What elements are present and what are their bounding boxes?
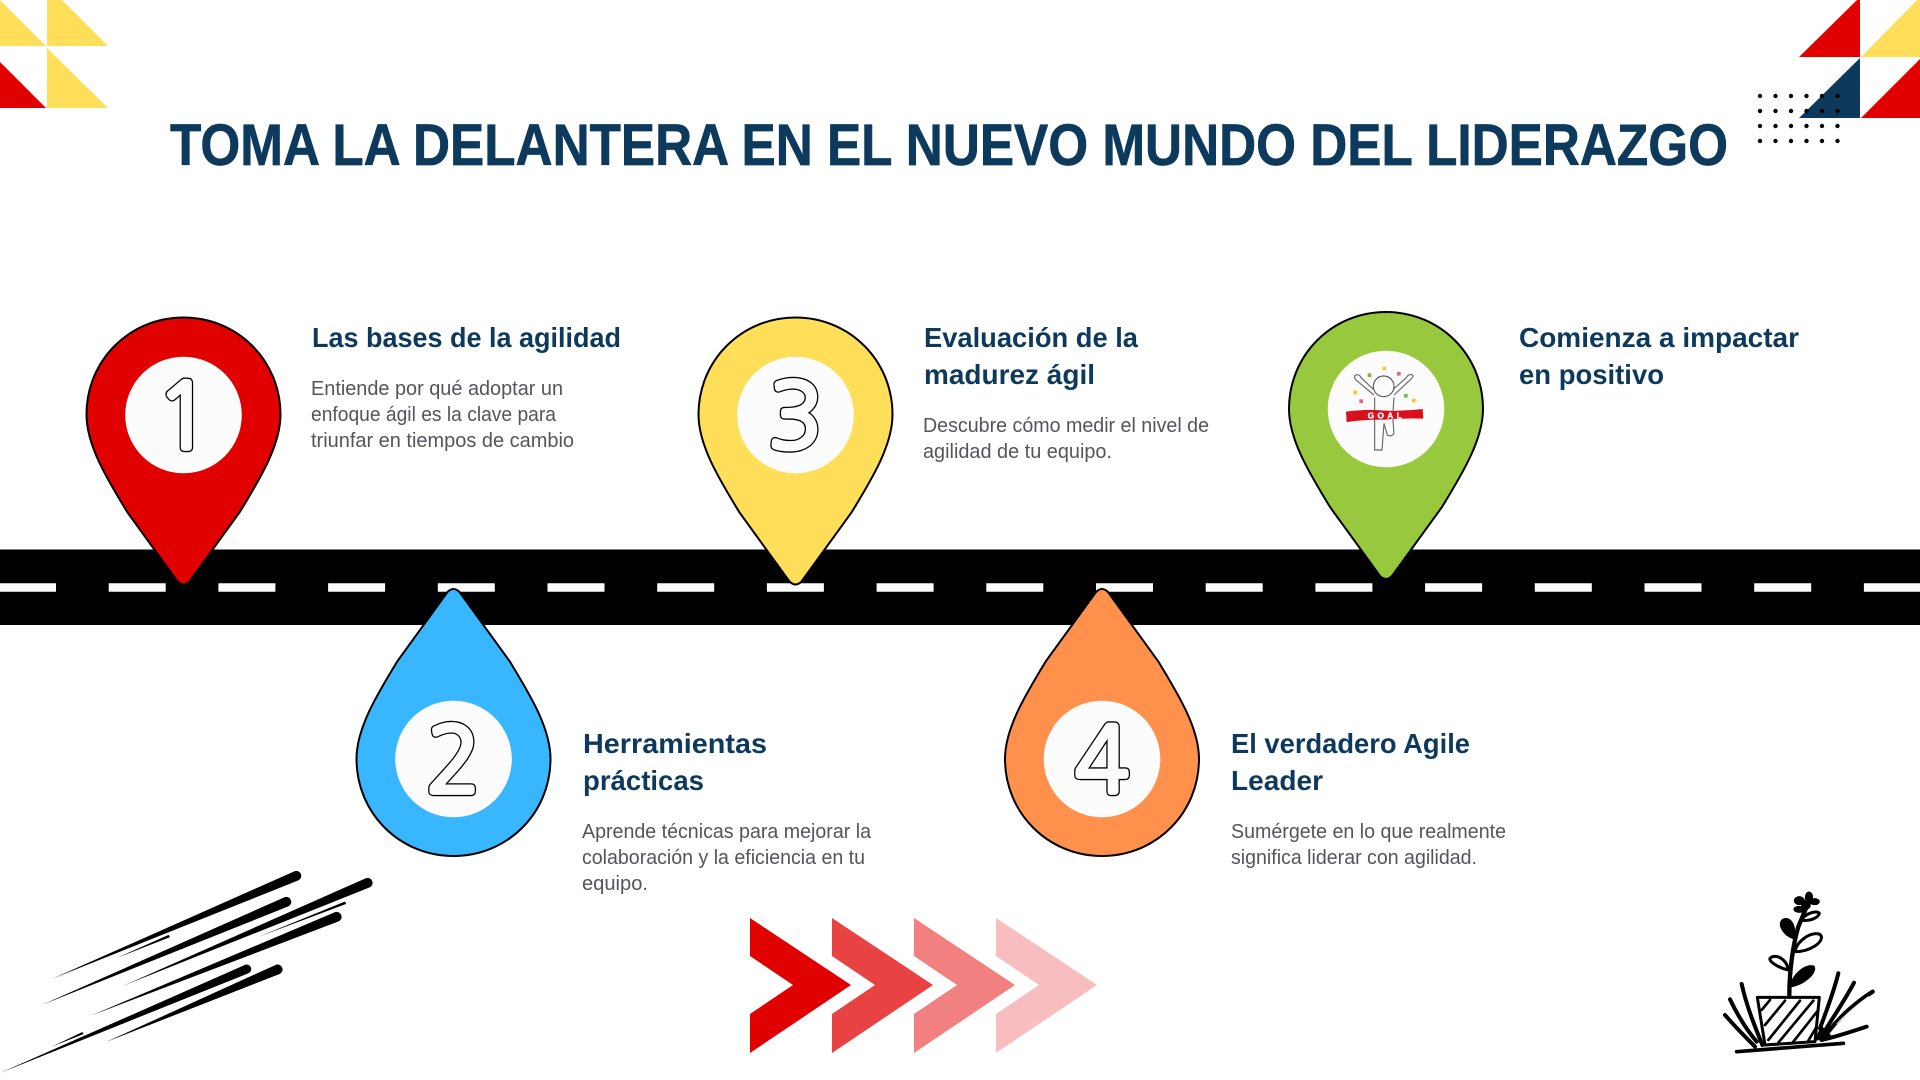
arrows: chevrons: [750, 918, 1097, 1053]
step 1 text: Las bases de la agilidad: [312, 322, 621, 353]
title: TOMA LA DELANTERA EN EL NUEVO MUNDO DEL LIDERAZGO: [170, 113, 1728, 178]
icon: potted plant: [1725, 892, 1873, 1052]
step 1 text: enfoque ágil es la clave para: [311, 403, 557, 426]
step 4 drop: 4: [1075, 715, 1129, 805]
step 4 text: Sumérgete en lo que realmente: [1231, 820, 1506, 843]
step 2 text: equipo.: [582, 872, 648, 895]
step 1 pin: 1: [156, 371, 211, 461]
step 3 pin: 3: [768, 371, 823, 461]
decoration: top-right triangles and dots: [1758, 0, 1920, 143]
icon: goal runner: [1346, 367, 1423, 450]
road: [0, 550, 1920, 625]
step 2 text: colaboración y la eficiencia en tu: [582, 846, 865, 869]
step 5 text: [1519, 322, 1799, 390]
step 2 drop: 2: [426, 715, 481, 805]
step 3 text: [923, 322, 1209, 463]
step 3 pin: 3: [768, 371, 823, 461]
step 3 text: agilidad de tu equipo.: [923, 440, 1112, 463]
step 5 text: Comienza a impactar: [1519, 322, 1799, 353]
step 3 text: madurez ágil: [924, 359, 1095, 390]
step 3 text: Descubre cómo medir el nivel de: [923, 414, 1209, 437]
step 2 drop: [356, 589, 550, 856]
step 4 text: Leader: [1231, 765, 1323, 796]
step 3 text: Evaluación de la: [924, 322, 1138, 353]
step 4 text: [1231, 728, 1506, 869]
decoration: speed lines: [0, 871, 373, 1073]
step 2 text: [582, 728, 872, 895]
decoration: top-left triangles: [0, 0, 108, 108]
step 3 pin: [698, 318, 892, 584]
step 4 text: El verdadero Agile: [1231, 728, 1470, 759]
step 1 text: Entiende por qué adoptar un: [311, 377, 563, 400]
step 1 text: triunfar en tiempos de cambio: [311, 429, 574, 452]
step 4 drop: 4: [1075, 715, 1129, 805]
step 5 pin with goal icon: [1289, 312, 1483, 579]
step 2 drop: 2: [426, 715, 481, 805]
step 2 text: Herramientas: [583, 728, 767, 759]
step 5 text: en positivo: [1519, 359, 1664, 390]
step 1 pin: 1: [156, 371, 211, 461]
step 1 pin: [86, 318, 280, 584]
step 2 text: Aprende técnicas para mejorar la: [582, 820, 872, 843]
step 1 text: [311, 322, 621, 452]
icon: goal runner: GOAL: [1368, 411, 1402, 421]
step 4 drop: [1005, 589, 1199, 856]
step 4 text: significa liderar con agilidad.: [1231, 846, 1477, 869]
step 2 text: prácticas: [583, 765, 704, 796]
